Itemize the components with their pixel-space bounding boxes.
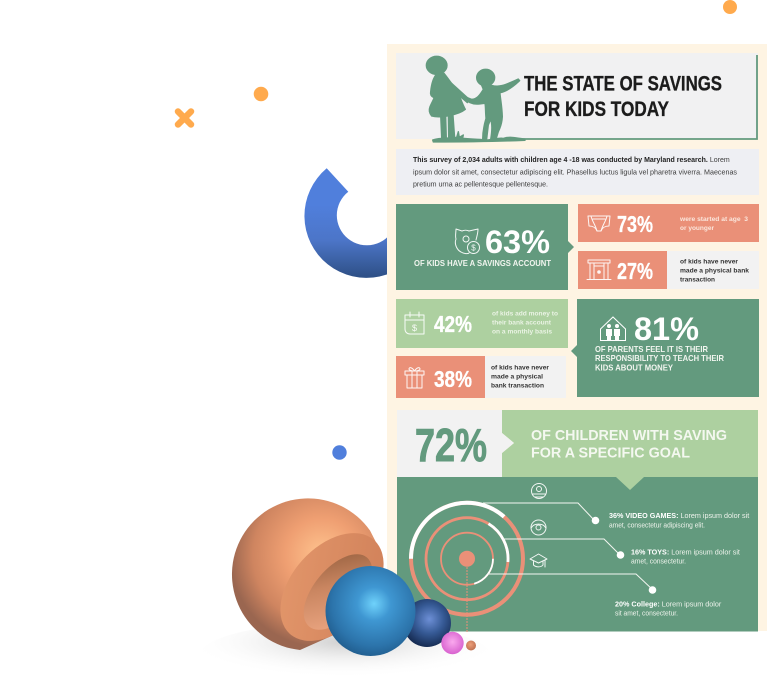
- stat panel: 27%: made a physical bank: [680, 268, 749, 274]
- stat panel: 81% parents: [571, 299, 759, 397]
- 3D cut sphere: [232, 498, 404, 661]
- icon: video game: [532, 484, 546, 498]
- decorative orange cross: [178, 112, 191, 124]
- 3D pink sphere: [441, 632, 464, 654]
- text: college: 20% College: Lorem ipsum dolor: [615, 600, 722, 608]
- 72% heading band: OF CHILDREN WITH SAVING: [531, 427, 727, 444]
- text: college: [615, 600, 722, 618]
- text: video games: [609, 511, 749, 530]
- silhouette of two children holding hands: [426, 56, 525, 142]
- stat panel: 73%: 73%: [617, 211, 653, 237]
- icon: graduation cap: [530, 554, 547, 567]
- intro text panel: ipsum dolor sit amet, consectetur adipiscing elit. Phasellus luctus ligula vel pharetra viverra. Maecenas: [413, 170, 737, 176]
- icon: piggy bank with coin: [455, 229, 480, 254]
- icon: calendar with dollar: [405, 312, 424, 334]
- 3D small orange sphere: [466, 640, 476, 650]
- 72% heading band: FOR A SPECIFIC GOAL: [531, 444, 690, 462]
- icon: bank building: [587, 260, 611, 280]
- floor shadow under spheres: [200, 622, 490, 682]
- stat panel: 73%: or younger: [680, 225, 714, 232]
- stat panel: 38%: bank transaction: [491, 382, 544, 390]
- stat panel: 38%: made a physical: [491, 374, 543, 380]
- infographic card: [387, 44, 767, 632]
- stat panel: 42%: their bank account: [492, 320, 552, 326]
- text: toys: 16% TOYS: Lorem ipsum dolor sit: [631, 548, 740, 556]
- icon: diaper: [588, 216, 610, 231]
- stat panel: 42%: of kids add money to: [492, 310, 558, 318]
- stat panel: 38%: of kids have never: [491, 364, 549, 372]
- 3D navy sphere: [403, 599, 451, 647]
- stat panel: 81% parents: 81%: [634, 311, 699, 347]
- title: FOR KIDS TODAY: [524, 97, 669, 121]
- stat panel: 42%: on a monthly basis: [492, 328, 552, 336]
- stat panel: 27%: 27%: [617, 258, 653, 284]
- stat panel: 63% savings account: 63%: [485, 224, 550, 260]
- title: [524, 72, 722, 121]
- icon: piggy bank with coin: $: [471, 244, 476, 252]
- title panel: [396, 53, 758, 142]
- 72% heading band: [397, 410, 758, 477]
- 3D blue sphere: [326, 566, 416, 656]
- stat panel: 81% parents: RESPONSIBILITY TO TEACH THEIR: [595, 353, 724, 363]
- 72% heading band: 72%: [415, 419, 487, 471]
- intro text panel: [396, 149, 759, 195]
- decorative blue dot: [332, 445, 347, 460]
- text: toys: [631, 548, 740, 566]
- text: toys: amet, consectetur.: [631, 556, 686, 566]
- icon: gift box: [405, 368, 424, 388]
- intro text panel: pretium urna ac pellentesque pellentesque.: [413, 182, 548, 188]
- stat panel: 73%: were started at age 3: [679, 216, 748, 223]
- stat panel: 63% savings account: OF KIDS HAVE A SAVINGS ACCOUNT: [414, 259, 551, 268]
- stat panel: 38%: 38%: [434, 366, 472, 392]
- decorative orange dot: [254, 87, 268, 101]
- decorative orange dot, top right: [723, 0, 737, 14]
- stat panel: 81% parents: KIDS ABOUT MONEY: [595, 362, 673, 372]
- decorative blue ring segment: [304, 168, 422, 278]
- radial chart: concentric rings: [411, 503, 523, 632]
- icon: toy ball: [531, 520, 546, 535]
- stat panel: 27%: of kids have never: [680, 258, 738, 266]
- text: college: sit amet, consectetur.: [615, 608, 678, 618]
- stat panel: 42%: [396, 299, 568, 348]
- stat panel: 27%: transaction: [680, 276, 715, 284]
- stat panel: 73%: [578, 204, 759, 242]
- stat panel: 63% savings account: [396, 204, 574, 290]
- icon: calendar with dollar: $: [412, 323, 417, 333]
- panel: saving goals: [397, 477, 758, 632]
- stat panel: 42%: 42%: [434, 311, 472, 337]
- intro text panel: This survey of 2,034 adults with children age 4 -18 was conducted by Maryland research. Lorem: [413, 157, 730, 164]
- text: video games: amet, consectetur adipiscing elit.: [609, 520, 705, 530]
- text: video games: 36% VIDEO GAMES: Lorem ipsum dolor sit: [609, 511, 749, 520]
- stat panel: 81% parents: OF PARENTS FEEL IT IS THEIR: [595, 344, 708, 354]
- icon: house with parents: [600, 317, 626, 340]
- leader lines with dots: [483, 503, 656, 594]
- stat panel: 38%: [396, 356, 566, 398]
- stat panel: 27%: [578, 251, 759, 289]
